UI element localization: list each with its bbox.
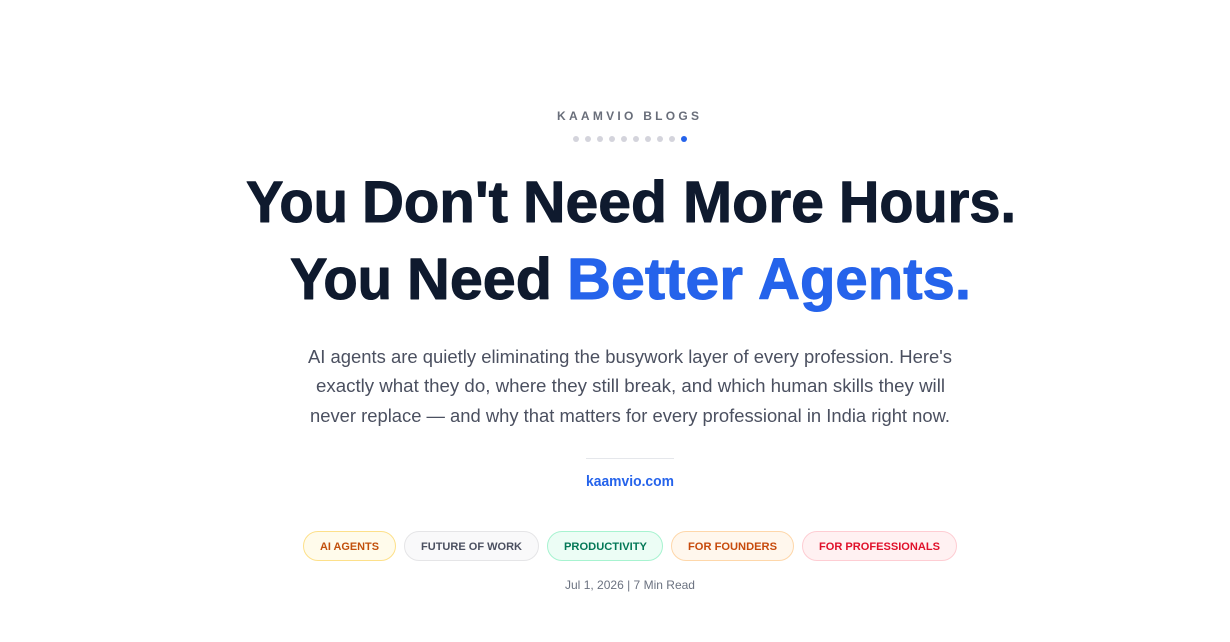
tag: AI Agents xyxy=(304,532,396,560)
tag: For Professionals xyxy=(802,532,956,560)
tag: For Founders xyxy=(672,532,794,560)
date and read time: Jul 1, 2026 | 7 Min Read xyxy=(565,578,695,592)
title: Better xyxy=(567,247,743,312)
title: Need xyxy=(407,247,552,312)
eyebrow: Kaamvio Blogs: KAAMVIO BLOGS xyxy=(557,109,699,123)
progress dots xyxy=(573,136,687,142)
title: Hours. xyxy=(839,170,1016,235)
description paragraph: never replace — and why that matters for every professional in India right now. xyxy=(310,406,950,426)
title: More xyxy=(683,170,824,235)
tag: AI Agents: AI AGENTS xyxy=(320,541,379,553)
title: Need xyxy=(523,170,667,235)
title: Agents. xyxy=(758,247,971,312)
title: Don't xyxy=(362,170,508,235)
website link: kaamvio.com xyxy=(586,474,674,490)
tag: Productivity xyxy=(548,532,662,560)
tag: Future of Work: FUTURE OF WORK xyxy=(421,541,522,553)
tag: Productivity: PRODUCTIVITY xyxy=(564,541,648,553)
tag: For Founders: FOR FOUNDERS xyxy=(688,541,777,553)
description paragraph xyxy=(308,347,952,426)
tag: For Professionals: FOR PROFESSIONALS xyxy=(819,541,940,553)
title: You xyxy=(246,170,348,235)
tag: Future of Work xyxy=(404,532,538,560)
title: You xyxy=(290,247,392,312)
description paragraph: AI agents are quietly eliminating the busywork layer of every profession. Here's xyxy=(308,347,952,367)
title xyxy=(246,170,1016,312)
description paragraph: exactly what they do, where they still break, and which human skills they will xyxy=(316,376,945,396)
